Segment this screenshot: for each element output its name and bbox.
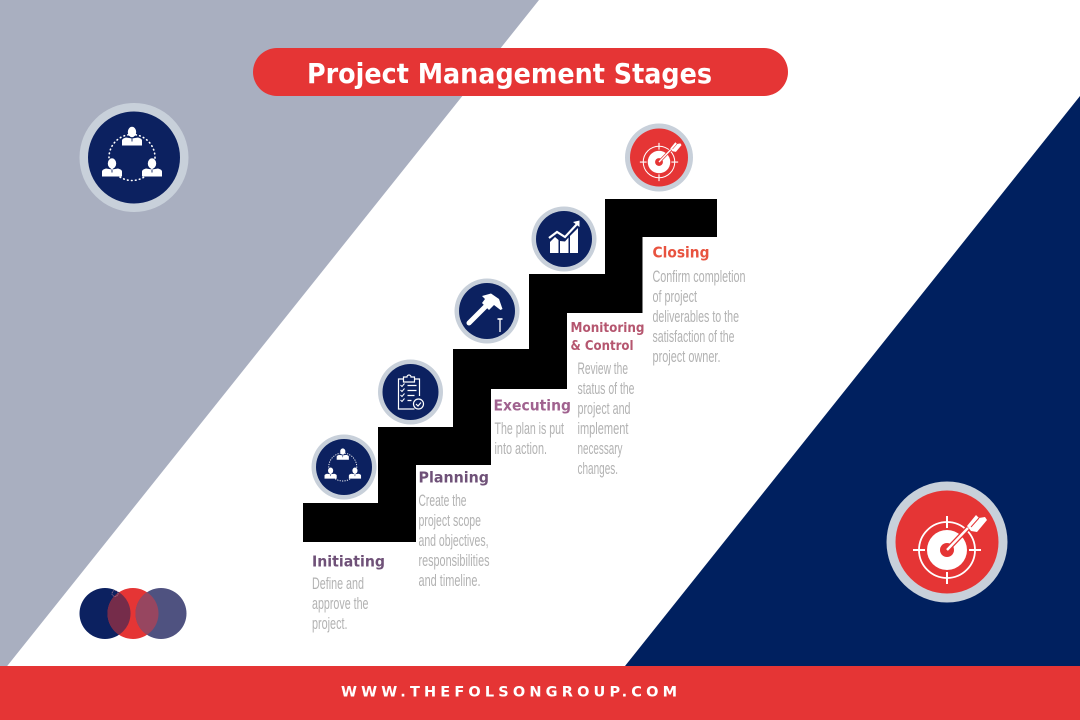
- stage: planning: and timeline.: [418, 572, 480, 590]
- stage: planning: Create the: [418, 492, 466, 510]
- stage: monitoring and control: necessary: [578, 440, 623, 458]
- footer bar: WWW.THEFOLSONGROUP.COM: [341, 684, 677, 700]
- stage: closing: [652, 244, 746, 366]
- stage: planning: Planning: [418, 468, 489, 486]
- stage: monitoring and control: status of the: [578, 380, 634, 398]
- stage: closing: satisfaction of the: [652, 328, 734, 346]
- stage: closing: deliverables to the: [652, 308, 739, 326]
- title banner: [253, 48, 788, 96]
- stage: monitoring and control: changes.: [578, 460, 618, 478]
- stage: monitoring and control: Monitoring: [570, 321, 644, 336]
- stage: initiating: [312, 552, 385, 633]
- icon: hammer step: [454, 278, 520, 344]
- overlapping circles decoration: [80, 588, 186, 639]
- icon: team step: [312, 434, 376, 500]
- stage: executing: into action.: [494, 440, 547, 458]
- stage: initiating: approve the: [312, 595, 368, 613]
- staircase: [303, 199, 717, 542]
- title banner: Project Management Stages: [307, 58, 712, 90]
- stage: executing: [494, 396, 571, 458]
- stage: initiating: project.: [312, 615, 348, 633]
- stage: planning: responsibilities: [418, 552, 490, 570]
- background: navy diagonal panel: [625, 96, 1080, 666]
- icon: target step: [625, 124, 693, 192]
- icon: clipboard step: [378, 360, 443, 424]
- stage: closing: Confirm completion: [652, 268, 746, 286]
- stage: closing: of project: [652, 288, 697, 306]
- stage: closing: Closing: [652, 244, 710, 262]
- stage: executing: The plan is put: [494, 420, 564, 438]
- stage: monitoring and control: & Control: [570, 339, 634, 354]
- stage: initiating: Initiating: [312, 552, 385, 570]
- stage: planning: project scope: [418, 512, 481, 530]
- stage: monitoring and control: [570, 321, 644, 478]
- icon: team circle large: [80, 103, 188, 212]
- stage: initiating: Define and: [312, 575, 364, 593]
- stage: executing: Executing: [494, 396, 571, 414]
- icon: growth chart step: [532, 206, 596, 272]
- icon: target circle large: [886, 482, 1008, 602]
- stage: monitoring and control: Review the: [578, 360, 628, 378]
- stage: planning: [418, 468, 490, 590]
- stage: monitoring and control: implement: [578, 420, 629, 438]
- footer bar: [0, 666, 1080, 720]
- stage: closing: project owner.: [652, 348, 720, 366]
- background: grey diagonal panel: [0, 0, 539, 675]
- stage: planning: and objectives,: [418, 532, 488, 550]
- stage: monitoring and control: project and: [578, 400, 630, 418]
